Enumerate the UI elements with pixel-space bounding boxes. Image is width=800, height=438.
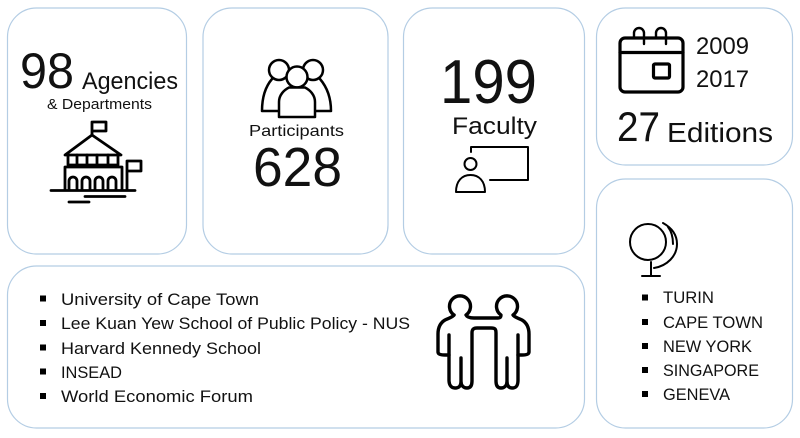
editions label: Editions (667, 117, 773, 148)
panel: locations (596, 179, 792, 428)
icon: globe (630, 223, 677, 276)
icon: teacher at board (456, 147, 528, 192)
start year: 2009 (696, 33, 749, 60)
list: cities (642, 288, 763, 404)
departments label: & Departments (47, 97, 152, 113)
icon: calendar (620, 28, 683, 92)
participants label: Participants (249, 123, 344, 140)
panel: faculty (404, 8, 584, 254)
list: partner institutions: World Economic Forum (61, 387, 253, 406)
panel: editions (596, 8, 792, 165)
icon: group of people (262, 60, 331, 117)
agencies label: Agencies (82, 68, 178, 95)
icon: two people side by side (438, 296, 529, 388)
list: cities: TURIN (663, 288, 714, 307)
list: cities: SINGAPORE (663, 361, 759, 380)
list: partner institutions: INSEAD (61, 363, 122, 382)
list: partner institutions: Lee Kuan Yew School of Public Policy - NUS (61, 314, 410, 333)
editions number: 27 (617, 103, 660, 150)
list: partner institutions: University of Cape Town (61, 290, 259, 309)
list: cities: CAPE TOWN (663, 313, 763, 332)
faculty label: Faculty (452, 113, 537, 140)
list: partner institutions: Harvard Kennedy School (61, 339, 261, 358)
faculty number: 199 (440, 48, 537, 117)
list: partner institutions (40, 290, 410, 406)
participants number: 628 (253, 136, 342, 198)
list: cities: GENEVA (663, 385, 731, 404)
list: cities: NEW YORK (663, 337, 753, 356)
agencies number: 98 (20, 43, 74, 99)
panel: participants (203, 8, 388, 254)
panel: agencies (8, 8, 186, 254)
icon: government building with flags (51, 122, 141, 202)
end year: 2017 (696, 66, 749, 93)
panel: partners (8, 266, 584, 428)
